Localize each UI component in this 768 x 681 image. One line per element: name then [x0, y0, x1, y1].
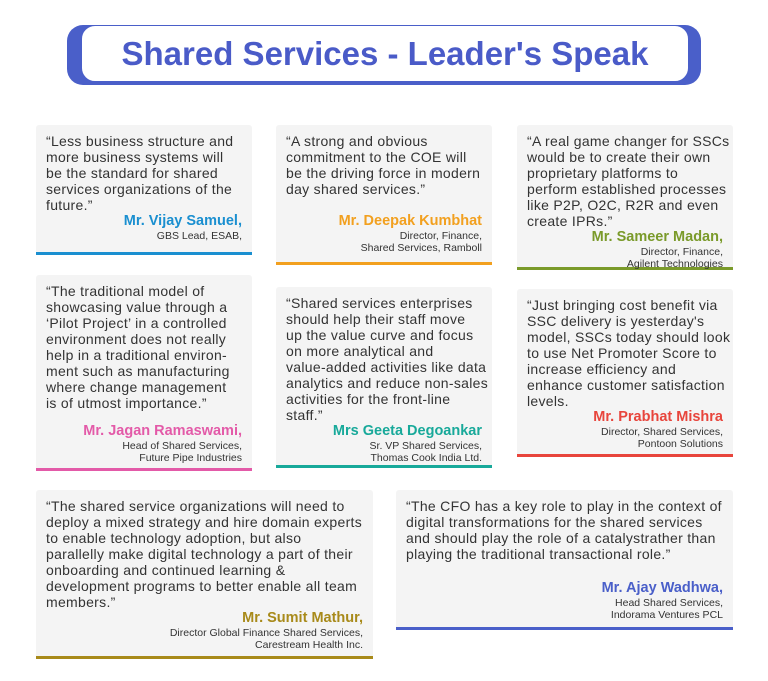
card: Sumit Mathur: Mr. Sumit Mathur,	[242, 610, 363, 626]
card: Geeta Degoankar: Thomas Cook India Ltd.	[371, 452, 482, 464]
card: Geeta Degoankar: should help their staff move	[286, 311, 465, 327]
card: Ajay Wadhwa: Indorama Ventures PCL	[611, 609, 723, 621]
card: Geeta Degoankar: Sr. VP Shared Services,	[370, 440, 482, 452]
card: Jagan Ramaswami: showcasing value through a	[46, 299, 227, 315]
card: Sameer Madan: create IPRs.”	[527, 213, 613, 229]
card: Sumit Mathur: deploy a mixed strategy and hire domain experts	[46, 514, 362, 530]
card: Vijay Samuel: “Less business structure and	[46, 133, 233, 149]
card: Sumit Mathur	[36, 490, 373, 659]
card: Geeta Degoankar: up the value curve and focus	[286, 327, 473, 343]
card: Deepak Kumbhat: “A strong and obvious	[286, 133, 428, 149]
card: Sameer Madan: Director, Finance,	[641, 246, 723, 258]
card: Sumit Mathur: parallelly make digital technology a part of their	[46, 546, 353, 562]
card: Deepak Kumbhat: Director, Finance,	[400, 230, 482, 242]
card: Jagan Ramaswami: ment such as manufacturing	[46, 363, 230, 379]
card: Jagan Ramaswami	[36, 275, 252, 471]
card: Ajay Wadhwa: “The CFO has a key role to play in the context of	[406, 498, 722, 514]
card: Geeta Degoankar: on more analytical and	[286, 343, 433, 359]
card: Deepak Kumbhat: day shared services.”	[286, 181, 425, 197]
card: Prabhat Mishra: “Just bringing cost benefit via	[527, 297, 718, 313]
card: Deepak Kumbhat	[276, 125, 492, 265]
card: Jagan Ramaswami: Head of Shared Services,	[122, 440, 242, 452]
card: Geeta Degoankar: activities for the front-line	[286, 391, 450, 407]
card: Geeta Degoankar: value-added activities like data	[286, 359, 486, 375]
card: Vijay Samuel: future.”	[46, 197, 93, 213]
card: Geeta Degoankar	[276, 287, 492, 468]
card: Prabhat Mishra: model, SSCs today should look	[527, 329, 730, 345]
card: Geeta Degoankar: analytics and reduce non-sales	[286, 375, 488, 391]
card: Sameer Madan: perform established processes	[527, 181, 726, 197]
card: Prabhat Mishra: increase efficiency and	[527, 361, 676, 377]
card: Sameer Madan: Agilent Technologies	[627, 258, 723, 270]
card: Jagan Ramaswami: help in a traditional environ-	[46, 347, 227, 363]
card: Geeta Degoankar: staff.”	[286, 407, 323, 423]
card: Deepak Kumbhat: Mr. Deepak Kumbhat	[339, 213, 482, 229]
card: Jagan Ramaswami: ‘Pilot Project’ in a controlled	[46, 315, 227, 331]
card: Sameer Madan	[517, 125, 733, 270]
card: Sumit Mathur: Director Global Finance Shared Services,	[170, 627, 363, 639]
card: Prabhat Mishra: SSC delivery is yesterday's	[527, 313, 704, 329]
card: Prabhat Mishra: to use Net Promoter Score to	[527, 345, 717, 361]
card: Vijay Samuel: more business systems will	[46, 149, 223, 165]
card: Ajay Wadhwa: Mr. Ajay Wadhwa,	[602, 580, 723, 596]
title banner: Shared Services - Leader's Speak	[122, 35, 648, 72]
card: Ajay Wadhwa: digital transformations for the shared services	[406, 514, 703, 530]
card: Deepak Kumbhat: Shared Services, Ramboll	[361, 242, 482, 254]
card: Jagan Ramaswami: is of utmost importance.”	[46, 395, 207, 411]
card: Sameer Madan: “A real game changer for SSCs	[527, 133, 729, 149]
card: Ajay Wadhwa: Head Shared Services,	[615, 597, 723, 609]
card: Prabhat Mishra	[517, 289, 733, 457]
card: Sumit Mathur: members.”	[46, 594, 116, 610]
card: Vijay Samuel	[36, 125, 252, 255]
card: Sumit Mathur: to enable technology adoption, but also	[46, 530, 301, 546]
card: Vijay Samuel: Mr. Vijay Samuel,	[124, 213, 242, 229]
card: Ajay Wadhwa	[396, 490, 733, 630]
card: Prabhat Mishra: Pontoon Solutions	[638, 438, 723, 450]
card: Ajay Wadhwa: playing the traditional transactional role.”	[406, 546, 671, 562]
card: Sumit Mathur: “The shared service organizations will need to	[46, 498, 345, 514]
card: Deepak Kumbhat: be the driving force in modern	[286, 165, 480, 181]
card: Prabhat Mishra: enhance customer satisfaction	[527, 377, 725, 393]
card: Prabhat Mishra: Mr. Prabhat Mishra	[593, 409, 723, 425]
card: Deepak Kumbhat: commitment to the COE will	[286, 149, 467, 165]
card: Jagan Ramaswami: Mr. Jagan Ramaswami,	[83, 423, 242, 439]
card: Jagan Ramaswami: where change management	[46, 379, 226, 395]
card: Prabhat Mishra: Director, Shared Services,	[601, 426, 723, 438]
card: Geeta Degoankar: “Shared services enterprises	[286, 295, 473, 311]
card: Sameer Madan: proprietary platforms to	[527, 165, 678, 181]
card: Prabhat Mishra: levels.	[527, 393, 569, 409]
card: Geeta Degoankar: Mrs Geeta Degoankar	[333, 423, 482, 439]
card: Vijay Samuel: services organizations of the	[46, 181, 232, 197]
card: Ajay Wadhwa: and should play the role of a catalystrather than	[406, 530, 716, 546]
card: Vijay Samuel: GBS Lead, ESAB,	[157, 230, 242, 242]
card: Vijay Samuel: be the standard for shared	[46, 165, 218, 181]
card: Jagan Ramaswami: Future Pipe Industries	[139, 452, 242, 464]
card: Sumit Mathur: development programs to better enable all team	[46, 578, 357, 594]
card: Sumit Mathur: onboarding and continued learning &	[46, 562, 285, 578]
card: Sumit Mathur: Carestream Health Inc.	[255, 639, 363, 651]
card: Sameer Madan: Mr. Sameer Madan,	[592, 229, 723, 245]
card: Sameer Madan: would be to create their own	[527, 149, 711, 165]
card: Sameer Madan: like P2P, O2C, R2R and even	[527, 197, 719, 213]
title banner	[67, 25, 701, 85]
card: Jagan Ramaswami: environment does not really	[46, 331, 226, 347]
card: Jagan Ramaswami: “The traditional model of	[46, 283, 204, 299]
